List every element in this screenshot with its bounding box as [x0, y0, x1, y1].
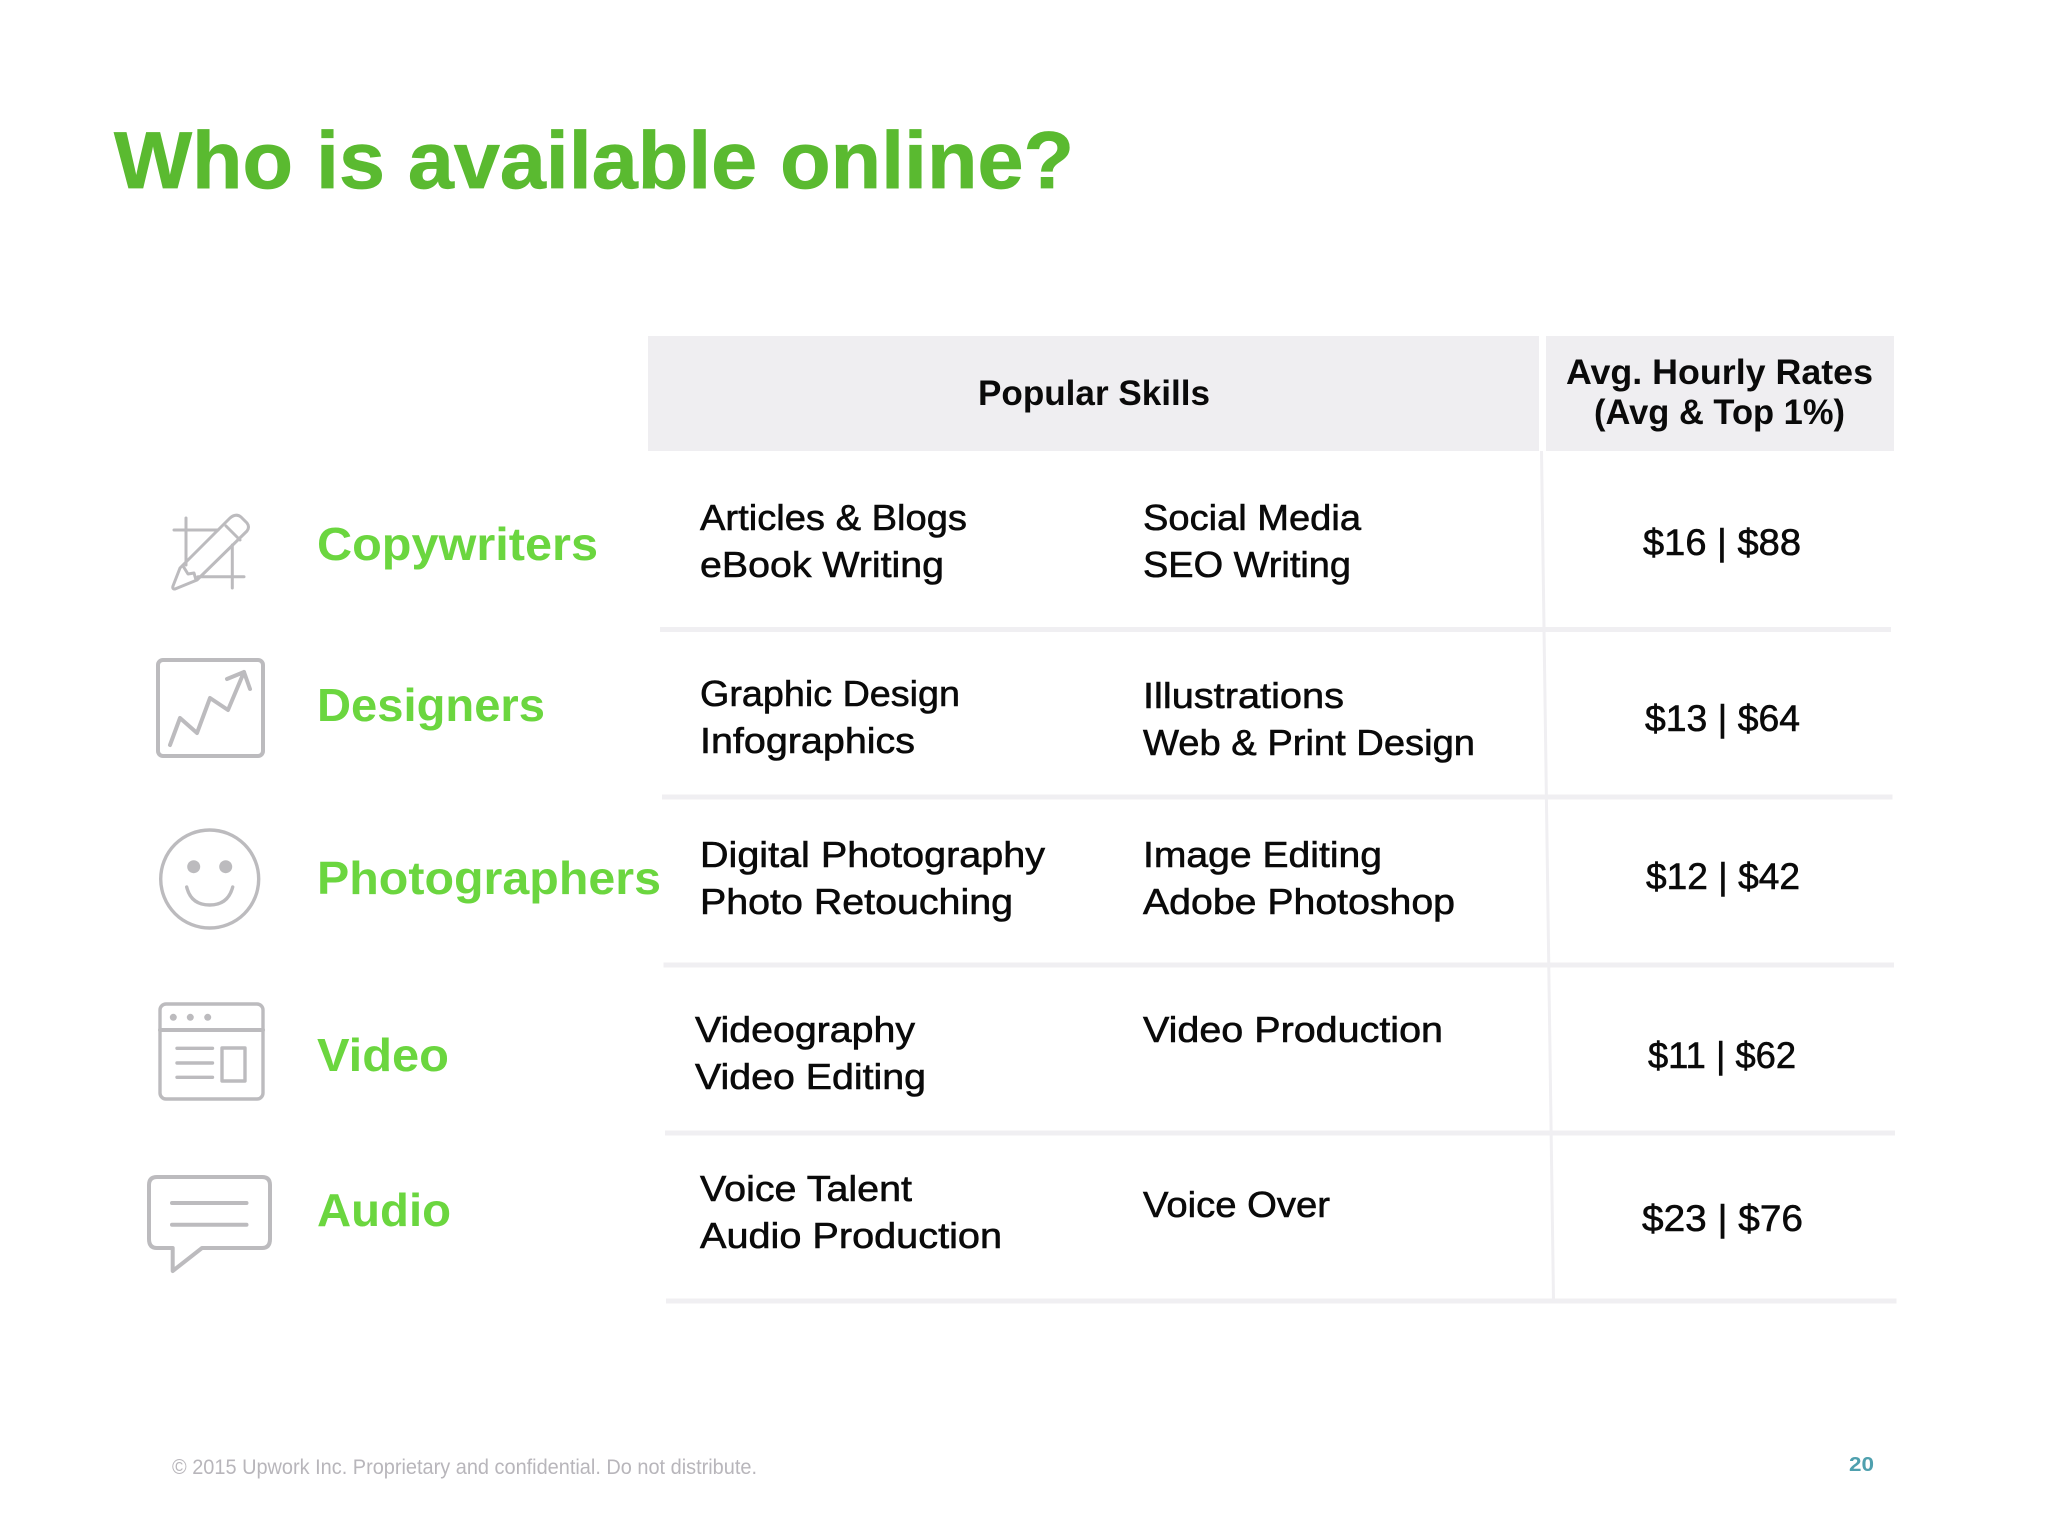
- icon: growth chart: [158, 660, 263, 756]
- rate: $16 | $88: [1643, 522, 1801, 563]
- skills: Voice Over: [1143, 1184, 1330, 1225]
- row: video: [160, 1004, 1796, 1099]
- row: photographers: [161, 830, 1800, 928]
- skills: Videography: [695, 1009, 915, 1050]
- label: Designers: [317, 679, 545, 731]
- label: Video: [317, 1029, 449, 1081]
- skills: Adobe Photoshop: [1143, 881, 1455, 922]
- skills: Illustrations: [1143, 675, 1344, 716]
- title: Who is available online?: [114, 116, 1074, 206]
- skills: Articles & Blogs: [700, 497, 967, 538]
- skills: Digital Photography: [700, 834, 1045, 875]
- table header: average hourly rates: (Avg & Top 1%): [1594, 393, 1845, 432]
- table header: average hourly rates: [1546, 336, 1894, 451]
- skills: Web & Print Design: [1143, 722, 1475, 763]
- rate: $13 | $64: [1645, 698, 1800, 739]
- label: Audio: [317, 1184, 451, 1236]
- footer copyright: © 2015 Upwork Inc. Proprietary and confidential. Do not distribute.: [172, 1456, 757, 1479]
- rate: $12 | $42: [1646, 856, 1800, 897]
- skills: Audio Production: [700, 1215, 1002, 1256]
- skills: Voice Talent: [700, 1168, 912, 1209]
- skills: Video Production: [1143, 1009, 1443, 1050]
- icon: smiley face: [161, 830, 259, 928]
- skills: [700, 1168, 1330, 1256]
- skills: Graphic Design: [700, 673, 960, 714]
- skills: Social Media: [1143, 497, 1362, 538]
- rate: $11 | $62: [1648, 1035, 1796, 1076]
- skills: [700, 497, 1362, 585]
- row: audio: [149, 1168, 1803, 1271]
- skills: Image Editing: [1143, 834, 1382, 875]
- page number: 20: [1849, 1454, 1874, 1476]
- rate: $23 | $76: [1642, 1198, 1803, 1239]
- icon: pencil and crop marks: [173, 515, 248, 589]
- row: designers: [158, 660, 1800, 763]
- skills: Infographics: [700, 720, 915, 761]
- icon: browser window: [160, 1004, 263, 1099]
- icon: speech bubble: [149, 1177, 270, 1271]
- table header: popular skills: Popular Skills: [978, 374, 1210, 413]
- table header: average hourly rates: Avg. Hourly Rates: [1566, 353, 1873, 392]
- skills: Video Editing: [695, 1056, 926, 1097]
- row: copywriters: [173, 497, 1801, 589]
- label: Copywriters: [317, 518, 598, 570]
- skills: Photo Retouching: [700, 881, 1013, 922]
- skills: SEO Writing: [1143, 544, 1351, 585]
- skills: [700, 673, 1475, 763]
- skills: [695, 1009, 1443, 1097]
- table header: popular skills: [648, 336, 1539, 451]
- label: Photographers: [317, 852, 661, 904]
- skills: [700, 834, 1455, 922]
- skills: eBook Writing: [700, 544, 944, 585]
